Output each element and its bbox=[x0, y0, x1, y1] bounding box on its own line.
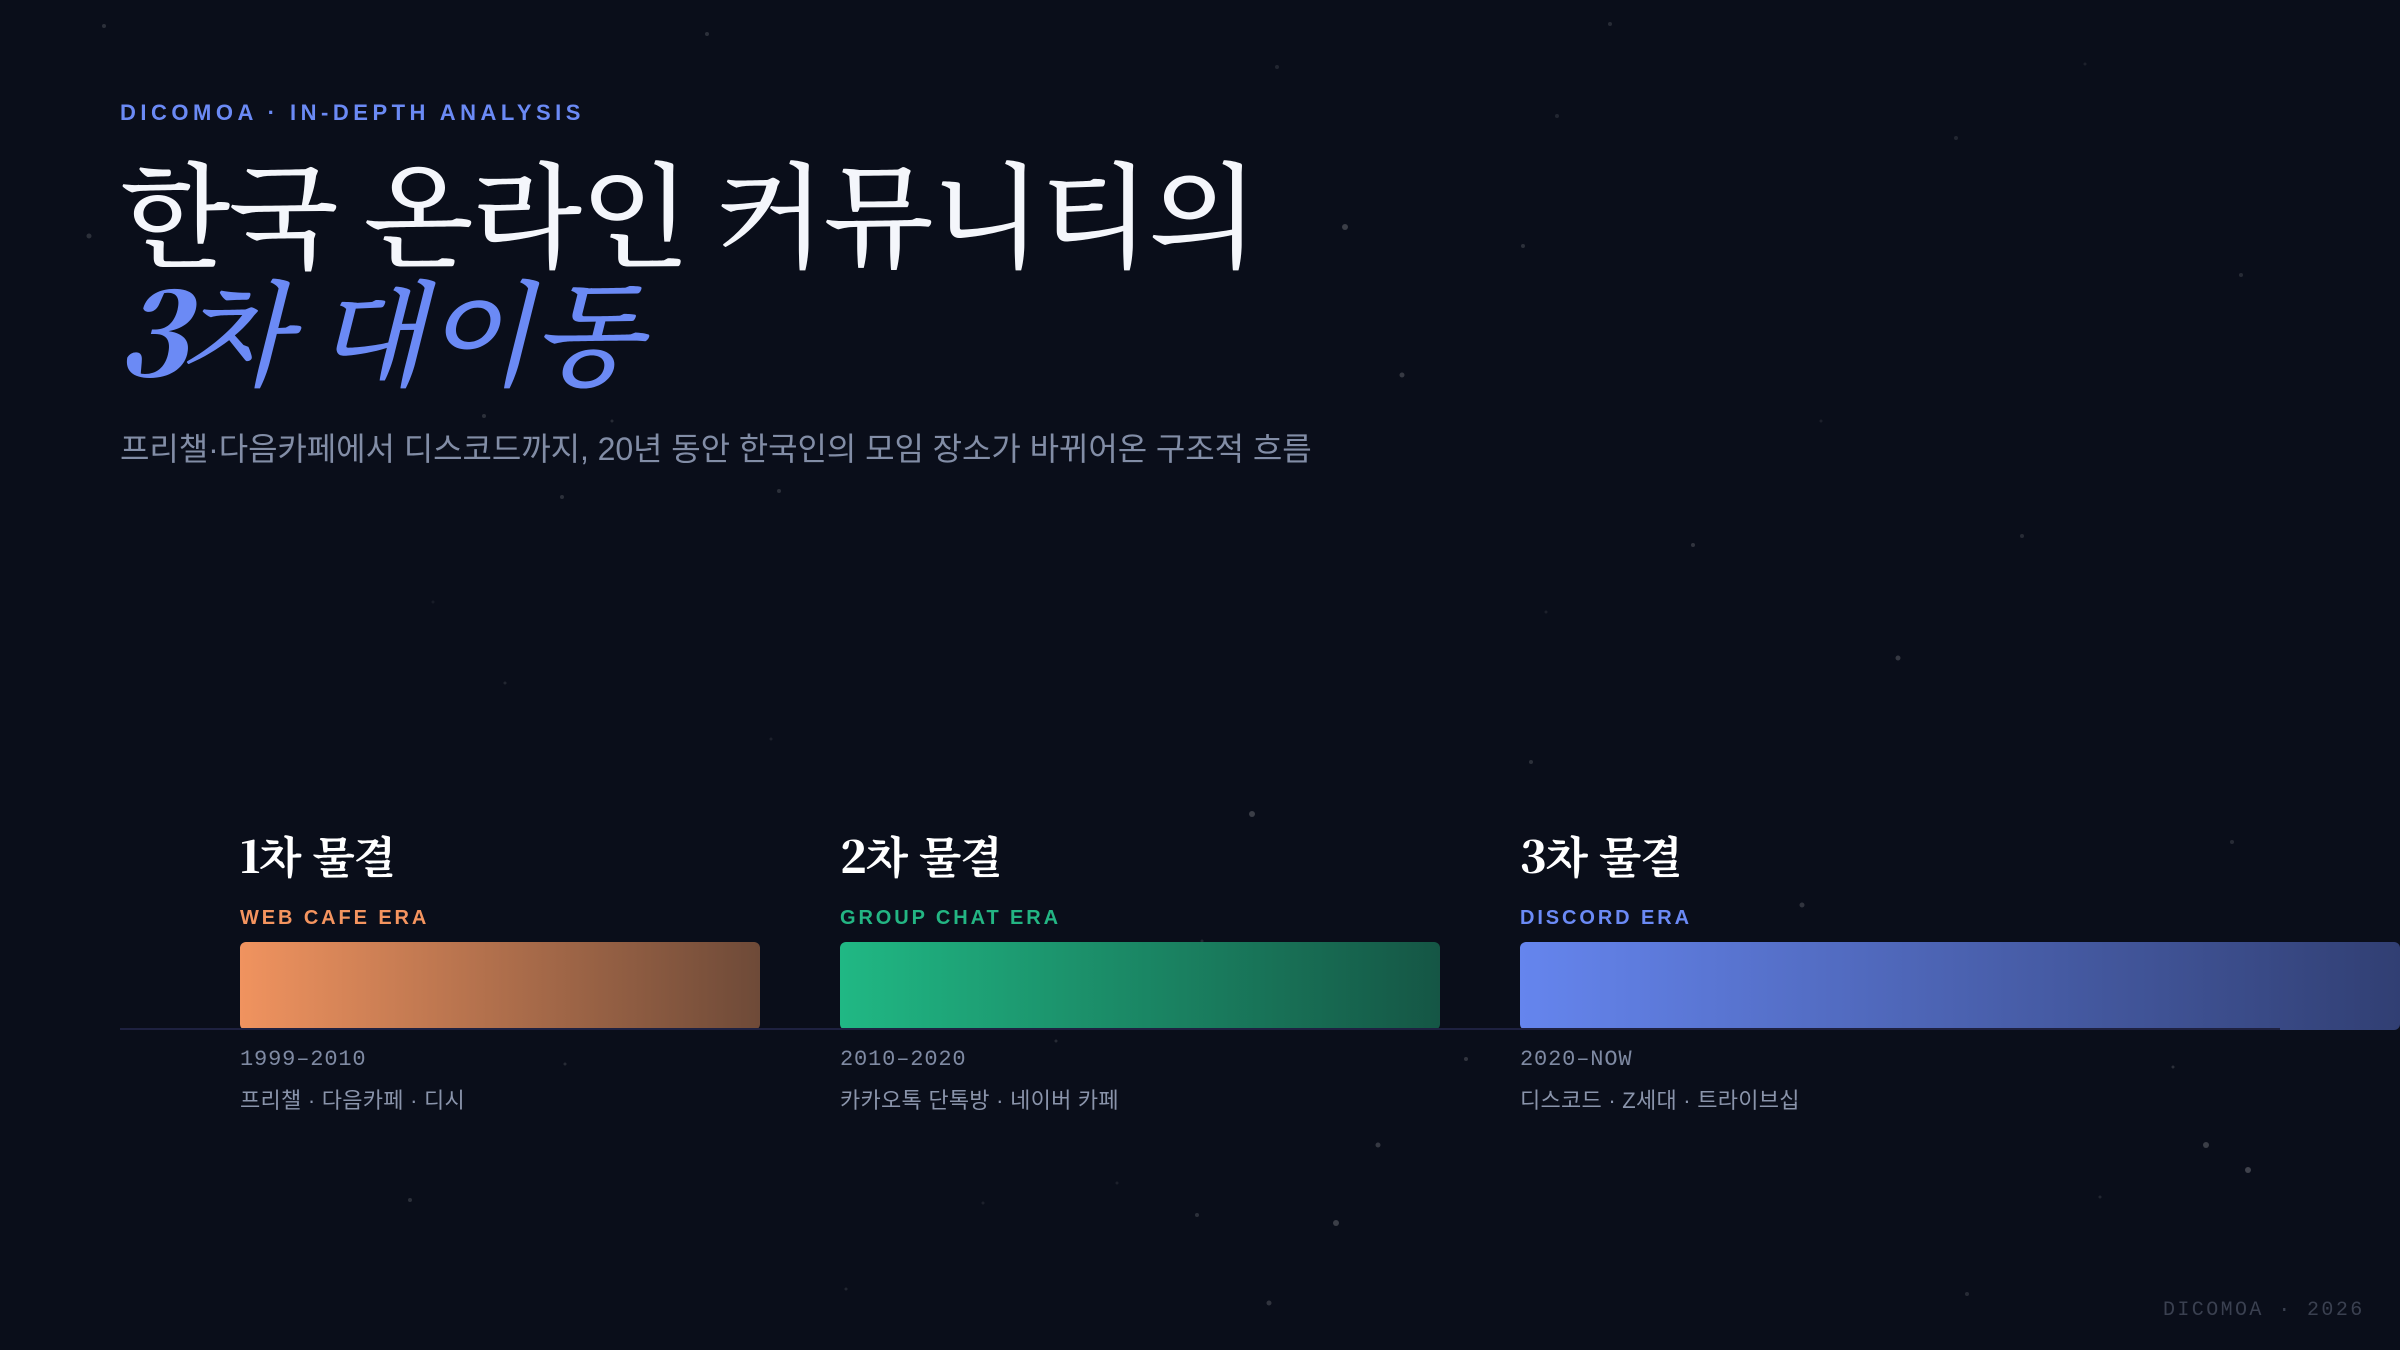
wave 3 bar bbox=[1520, 942, 2400, 1030]
wave 3 era label: DISCORD ERA bbox=[1520, 907, 1692, 929]
wave 3 dates: 2020–NOW bbox=[1520, 1047, 1632, 1072]
footer: DICOMOA · 2026 bbox=[2163, 1299, 2365, 1322]
title: 한국 온라인 커뮤니티의 bbox=[120, 127, 1257, 291]
wave 1 bar bbox=[240, 942, 760, 1030]
timeline baseline bbox=[120, 1028, 2280, 1030]
wave 3 bbox=[1520, 822, 2400, 1113]
wave 2 bar bbox=[840, 942, 1440, 1030]
wave 1 bbox=[240, 822, 760, 1113]
wave 1 heading: 1차 물결 bbox=[240, 822, 395, 886]
wave 2 heading: 2차 물결 bbox=[840, 822, 1001, 886]
wave 1 dates: 1999–2010 bbox=[240, 1047, 366, 1072]
title: 3차 대이동 bbox=[118, 245, 640, 409]
title bbox=[118, 127, 1257, 409]
wave 2 dates: 2010–2020 bbox=[840, 1047, 966, 1072]
eyebrow label: DICOMOA · IN-DEPTH ANALYSIS bbox=[120, 100, 585, 125]
wave 2 description: 카카오톡 단톡방 · 네이버 카페 bbox=[840, 1088, 1119, 1113]
subtitle: 프리챌·다음카페에서 디스코드까지, 20년 동안 한국인의 모임 장소가 바뀌어온 구조적 흐름 bbox=[120, 431, 1312, 467]
wave 2 era label: GROUP CHAT ERA bbox=[840, 907, 1061, 929]
wave 2 bbox=[840, 822, 1440, 1113]
wave 3 heading: 3차 물결 bbox=[1520, 822, 1681, 886]
wave 1 description: 프리챌 · 다음카페 · 디시 bbox=[240, 1088, 465, 1113]
wave 1 era label: WEB CAFE ERA bbox=[240, 907, 429, 929]
wave 3 description: 디스코드 · Z세대 · 트라이브십 bbox=[1520, 1088, 1800, 1113]
